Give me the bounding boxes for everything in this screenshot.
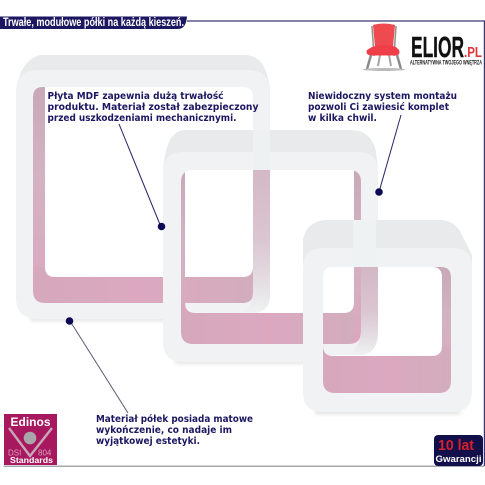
- callout: matte finish: wykończenie, co nadaje im: [96, 424, 232, 436]
- callout: matte finish: Materiał półek posiada matowe: [96, 413, 253, 425]
- badge: 10 year warranty: [434, 435, 483, 466]
- logo: [363, 24, 482, 71]
- badge: Edinos standards: Standards: [10, 455, 53, 465]
- callout: mounting: w kilka chwil.: [308, 113, 377, 124]
- callout: mounting: pozwoli Ci zawiesić komplet: [308, 101, 449, 113]
- callout: matte finish: [96, 413, 253, 447]
- badge: 10 year warranty: Gwarancji: [436, 454, 482, 465]
- callout: MDF board: [48, 90, 259, 124]
- callout: matte finish: wyjątkowej estetyki.: [96, 436, 200, 447]
- badge: 10 year warranty: 10 lat: [438, 437, 474, 454]
- badge: Edinos standards: 804: [38, 448, 52, 458]
- pointer: mounting: [375, 115, 401, 196]
- callout: MDF board: Płyta MDF zapewnia dużą trwałość: [48, 90, 224, 102]
- badge: Edinos standards: Edinos: [10, 415, 51, 429]
- icon: red chair: [363, 24, 405, 71]
- pointer: matte finish: [66, 317, 128, 413]
- callout: mounting: Niewidoczny system montażu: [308, 91, 457, 102]
- small shelf: [303, 220, 472, 414]
- callout: MDF board: produktu. Materiał został zabezpieczony: [48, 102, 259, 113]
- medium shelf: [163, 130, 378, 364]
- title tab: Trwałe, modułowe półki na każdą kieszeń.: [3, 17, 184, 29]
- large shelf: [16, 55, 270, 321]
- callout: MDF board: przed uszkodzeniami mechanicznymi.: [48, 113, 236, 124]
- badge: Edinos standards: [4, 414, 57, 465]
- callout: mounting: [308, 91, 457, 124]
- pointer: MDF board: [119, 124, 165, 230]
- badge: Edinos standards: DSI: [8, 448, 21, 458]
